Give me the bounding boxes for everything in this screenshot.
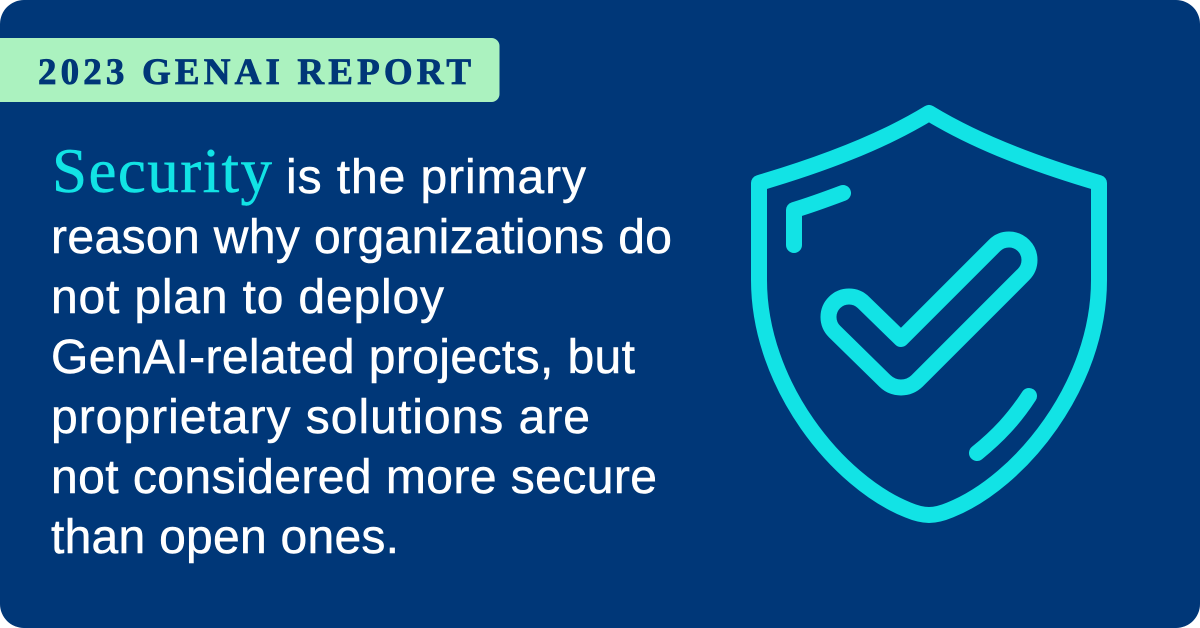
shine: lower right	[977, 396, 1029, 453]
badge: report label: 2023 GENAI REPORT	[38, 52, 471, 93]
statement line 4: GenAI-related projects, but	[51, 331, 635, 384]
statement line 5: proprietary solutions are	[51, 391, 590, 444]
badge: report label	[0, 38, 500, 102]
statement line 1: is the primary	[286, 151, 586, 204]
highlighted word: Security: Security	[52, 136, 272, 206]
shine: upper left	[794, 193, 843, 245]
statement line 7: than open ones.	[51, 511, 399, 564]
shield outline	[759, 113, 1099, 515]
text block: main statement	[51, 136, 672, 564]
icon: shield with check mark	[759, 113, 1099, 515]
check mark	[828, 240, 1029, 387]
statement line 3: not plan to deploy	[51, 271, 444, 324]
statement line 2: reason why organizations do	[51, 211, 672, 264]
statement line 6: not considered more secure	[51, 451, 657, 504]
